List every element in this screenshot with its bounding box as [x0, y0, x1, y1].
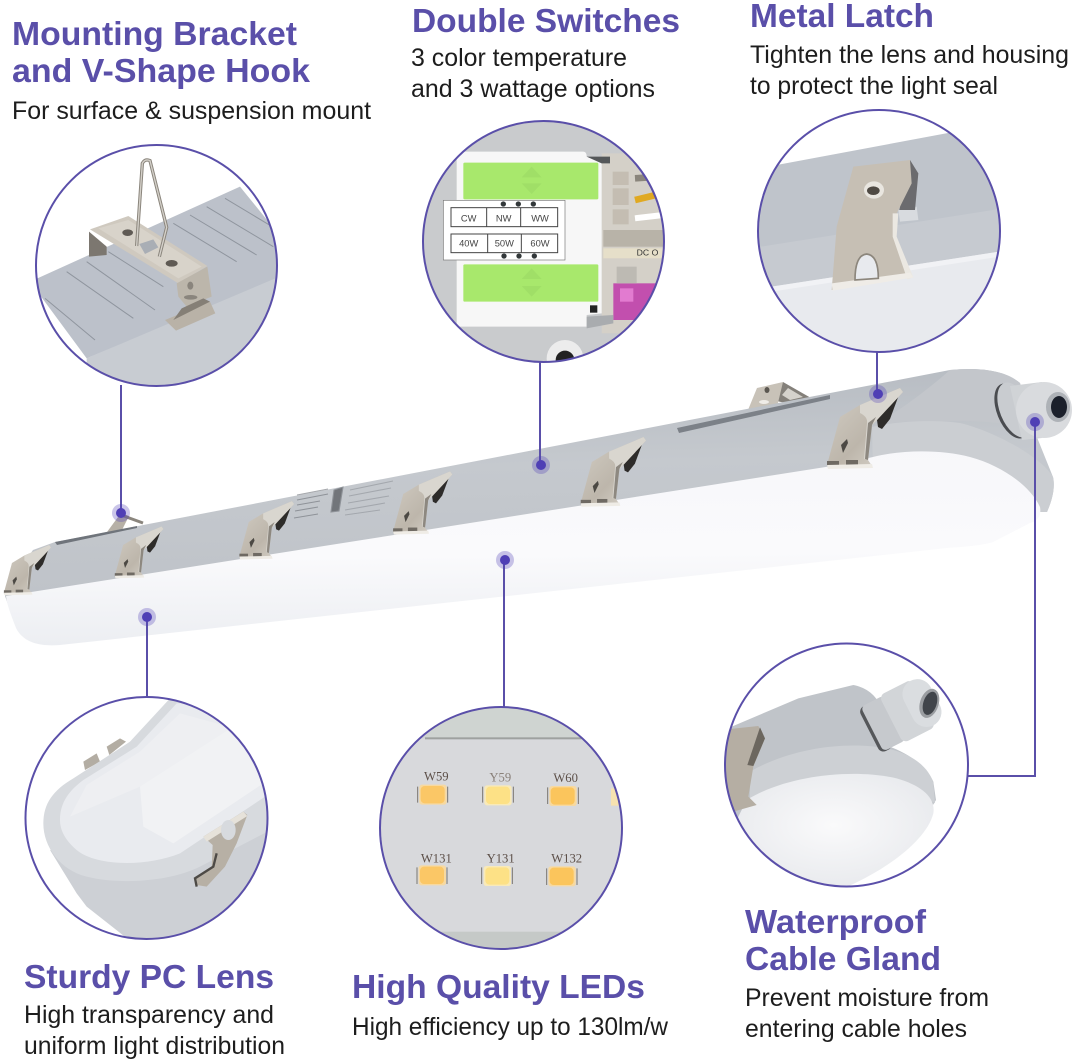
circle: double switches detail [423, 121, 668, 377]
latch plate [832, 160, 912, 290]
switch label [443, 200, 565, 260]
circle: double switches detail: WW [531, 213, 549, 223]
light fixture [4, 369, 1072, 645]
text: waterproof cable gland [745, 904, 989, 1043]
rear clips [83, 753, 100, 770]
bracket top plate [90, 216, 207, 283]
circle: double switches detail: DC O [637, 248, 659, 258]
text: metal latch: Tighten the lens and housing [750, 41, 1069, 69]
circle: high quality LEDs detail: Y131 [487, 851, 515, 865]
text: double switches: 3 color temperature [411, 44, 627, 72]
LED labels: W59 [424, 770, 449, 784]
text: mounting bracket: and V-Shape Hook [12, 53, 310, 90]
circle: high quality LEDs detail: W131 [421, 851, 452, 865]
circle: double switches detail: 40W [459, 239, 478, 249]
circle: double switches detail: CW [461, 213, 477, 223]
circle: mounting bracket detail [30, 145, 283, 393]
end cap ring band [872, 421, 1054, 512]
side latch [726, 726, 764, 811]
text: high quality LEDs [352, 969, 669, 1041]
text: waterproof cable gland: Prevent moisture from [745, 984, 989, 1012]
text: high quality LEDs: High efficiency up to 130lm/w [352, 1013, 669, 1041]
text: sturdy PC lens: Sturdy PC Lens [24, 959, 274, 996]
text: mounting bracket: For surface & suspension mount [12, 97, 371, 125]
dome [60, 703, 264, 863]
anchor dots [112, 385, 1044, 626]
rear bracket: right [748, 382, 811, 410]
dark strip: left [55, 526, 137, 545]
text: metal latch [750, 0, 1069, 100]
circle: high quality LEDs detail [375, 700, 630, 955]
LEDs [417, 787, 578, 885]
label sticker [294, 481, 393, 518]
circle: high quality LEDs detail: W60 [553, 771, 578, 785]
circle: high quality LEDs detail: Y59 [489, 771, 511, 785]
rim [43, 697, 283, 881]
circle: double switches detail: 50W [495, 239, 514, 249]
text: sturdy PC lens: High transparency and [24, 1001, 274, 1029]
mounting hole [546, 340, 583, 361]
text: sturdy PC lens: uniform light distribution [24, 1032, 285, 1060]
circle: double switches detail: 60W [530, 239, 550, 249]
connector lines [121, 352, 1035, 776]
text: double switches: Double Switches [412, 3, 680, 40]
right end cap [872, 369, 1032, 430]
circle: sturdy PC lens detail [26, 697, 283, 943]
wire hook [137, 160, 167, 257]
latch [195, 812, 247, 887]
gland housing [732, 685, 936, 817]
circle: waterproof cable gland detail [720, 644, 968, 888]
housing body [5, 369, 1054, 610]
green sliders [463, 163, 598, 199]
text: waterproof cable gland: Waterproof [745, 904, 927, 941]
circle: metal latch detail [757, 109, 1001, 353]
circle: double switches detail: NW [496, 213, 512, 223]
dome lens [733, 774, 934, 888]
cable gland [987, 377, 1072, 444]
text: high quality LEDs: High Quality LEDs [352, 969, 645, 1006]
driver module [457, 152, 602, 327]
text: metal latch: to protect the light seal [750, 72, 998, 100]
rear bracket: left [107, 513, 143, 532]
terminal area [602, 153, 668, 333]
surface panel [86, 278, 276, 385]
cable gland [860, 679, 942, 752]
text: waterproof cable gland: entering cable holes [745, 1015, 967, 1043]
text: sturdy PC lens [24, 959, 285, 1060]
text: waterproof cable gland: Cable Gland [745, 941, 941, 978]
bracket legs [89, 232, 107, 257]
dark vent strip [677, 395, 830, 433]
latches [4, 388, 903, 595]
text: double switches: and 3 wattage options [411, 75, 655, 103]
text: mounting bracket: Mounting Bracket [12, 16, 297, 53]
lower housing [50, 832, 266, 938]
lens [6, 451, 1040, 645]
circle: high quality LEDs detail: W132 [551, 852, 582, 866]
text: double switches [411, 3, 680, 103]
text: mounting bracket [12, 16, 371, 125]
